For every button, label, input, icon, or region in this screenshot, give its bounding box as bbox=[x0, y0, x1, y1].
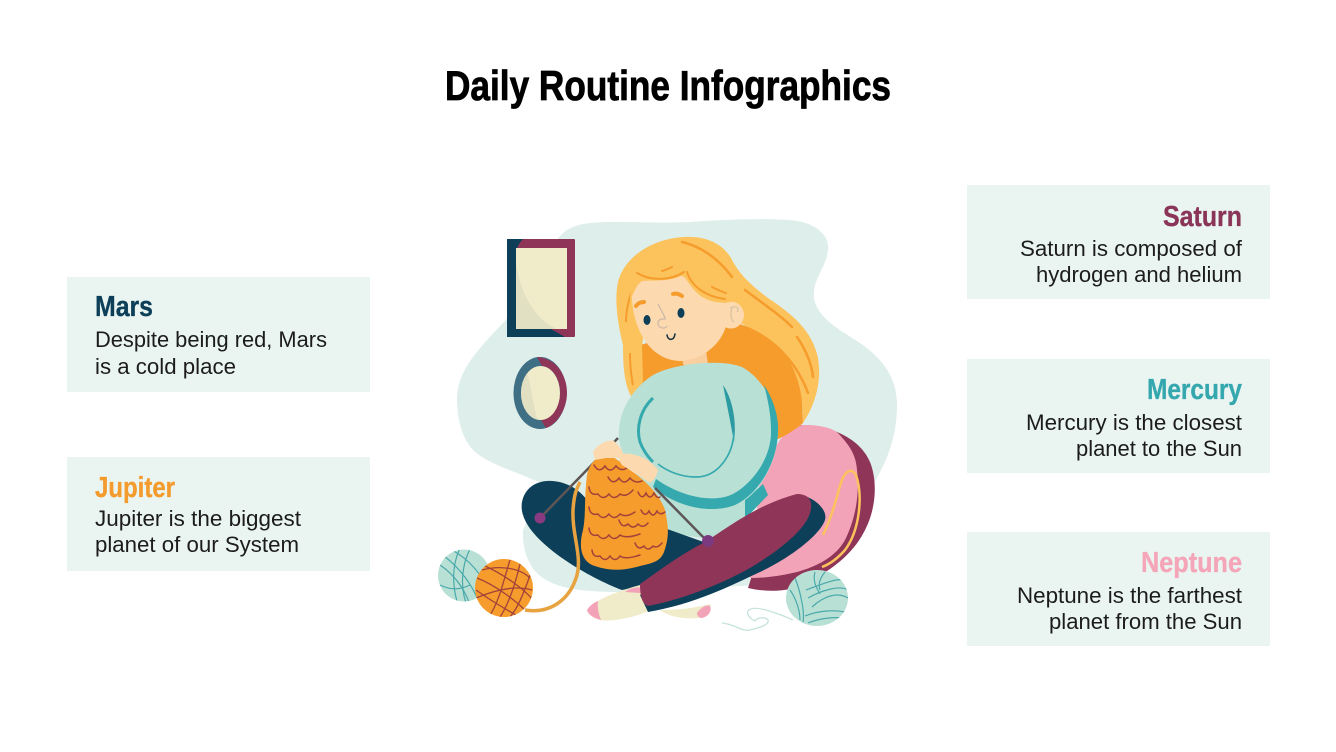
face bbox=[630, 259, 744, 369]
heading: Neptune: Neptune bbox=[1141, 547, 1242, 579]
left leg bbox=[522, 481, 712, 590]
text: Neptune description bbox=[1017, 583, 1242, 634]
heading: Jupiter: Jupiter bbox=[95, 472, 175, 504]
neck bbox=[682, 350, 708, 369]
illustration: girl knitting bbox=[438, 219, 897, 630]
hands bbox=[593, 441, 658, 482]
ear bbox=[718, 302, 744, 328]
icon: oval wall mirror bbox=[514, 357, 567, 429]
yarn ball: teal left bbox=[438, 550, 488, 602]
right needle bbox=[655, 488, 707, 541]
sock and foot bbox=[587, 585, 711, 621]
yarn ball: teal right bbox=[786, 570, 848, 626]
text: Mars description bbox=[95, 327, 327, 379]
knitted piece bbox=[581, 455, 668, 570]
fringe bbox=[630, 259, 732, 303]
text: Mars description: Despite being red, Mars bbox=[95, 327, 327, 352]
text: Neptune description: planet from the Sun bbox=[1049, 609, 1242, 634]
text: Saturn description: hydrogen and helium bbox=[1036, 262, 1242, 287]
text: Mars description: is a cold place bbox=[95, 354, 236, 379]
text: Mercury description: planet to the Sun bbox=[1076, 436, 1242, 461]
eyebrows bbox=[636, 294, 682, 306]
panel: Neptune bbox=[967, 532, 1270, 646]
yarn strand bbox=[525, 482, 580, 611]
text: Mercury description: Mercury is the closest bbox=[1026, 410, 1242, 435]
text: Jupiter description bbox=[95, 506, 301, 557]
heading: Saturn: Saturn bbox=[1163, 201, 1242, 233]
yarn ball: orange bbox=[475, 559, 533, 617]
text: Saturn description: Saturn is composed of bbox=[1020, 236, 1243, 261]
text: Jupiter description: Jupiter is the biggest bbox=[95, 506, 301, 531]
eyes bbox=[644, 315, 650, 325]
title: Daily Routine Infographics bbox=[445, 62, 891, 109]
loose yarn thread bbox=[722, 608, 793, 630]
panel: Mars bbox=[67, 277, 370, 392]
panel: Mercury bbox=[967, 359, 1270, 473]
heading: Mercury: Mercury bbox=[1147, 374, 1242, 406]
text: Saturn description bbox=[1020, 236, 1243, 287]
text: Mercury description bbox=[1026, 410, 1242, 461]
sweater bbox=[619, 363, 778, 538]
icon: rectangular wall frame bbox=[507, 239, 575, 337]
panel: Saturn bbox=[967, 185, 1270, 299]
head bbox=[632, 275, 727, 361]
pillow bbox=[748, 425, 875, 591]
panel: Jupiter bbox=[67, 457, 370, 571]
smile bbox=[667, 334, 675, 339]
left needle bbox=[540, 438, 618, 518]
hair bbox=[616, 237, 819, 440]
text: Neptune description: Neptune is the farthest bbox=[1017, 583, 1242, 608]
needle knob left bbox=[534, 512, 546, 524]
right leg bbox=[640, 494, 825, 612]
needle knob right bbox=[702, 535, 714, 547]
text: Jupiter description: planet of our System bbox=[95, 532, 299, 557]
background blob bbox=[457, 219, 897, 592]
stitch marks bbox=[589, 465, 665, 560]
nose bbox=[658, 304, 667, 328]
heading: Mars: Mars bbox=[95, 291, 153, 323]
